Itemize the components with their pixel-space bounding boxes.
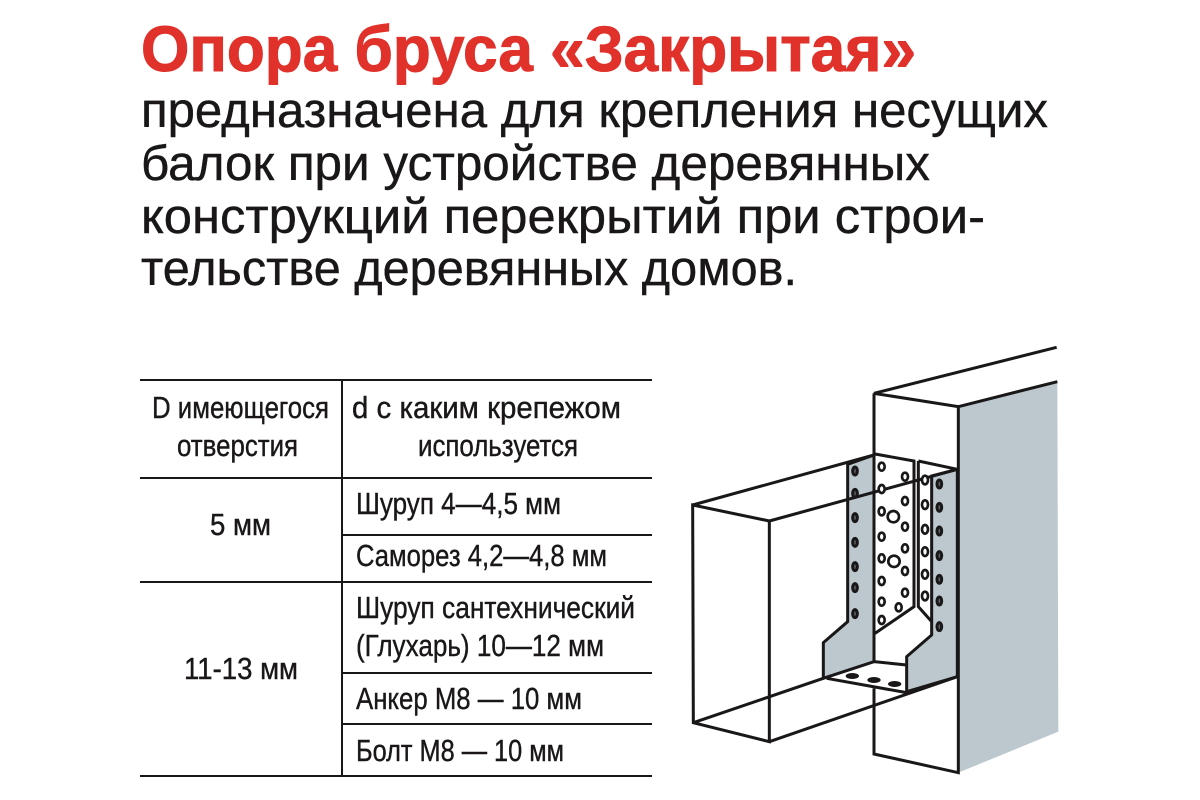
description text block [141, 84, 1048, 296]
table column: fasteners: Болт М8 — 10 мм [356, 733, 564, 768]
table column: hole diameter: 5 мм [210, 507, 271, 542]
table header: используется [418, 428, 578, 463]
back plate holes [879, 463, 928, 624]
table column: fasteners: Шуруп 4—4,5 мм [356, 486, 561, 521]
table header [152, 390, 621, 463]
table header: d с каким крепежом [352, 390, 621, 425]
description text block: балок при устройстве деревянных [141, 137, 930, 191]
beam hanger illustration [693, 347, 1058, 773]
description text block: конструкций перекрытий при строи- [141, 190, 985, 244]
table column: fasteners: (Глухарь) 10—12 мм [356, 628, 604, 663]
hanger right flange [907, 469, 957, 692]
table column: fasteners: Анкер М8 — 10 мм [356, 681, 582, 716]
description text block: предназначена для крепления несущих [141, 84, 1048, 138]
flange holes left [853, 467, 857, 618]
hanger back plate [875, 454, 914, 633]
fastener table [140, 380, 652, 776]
hanger left flange [823, 455, 874, 678]
description text block: тельстве деревянных домов. [141, 242, 797, 296]
post side face [958, 382, 1058, 773]
seat holes [846, 673, 901, 687]
table column: hole diameter: 11-13 мм [184, 651, 298, 686]
table column: fasteners: Шуруп сантехнический [356, 590, 635, 625]
table header: отверстия [177, 428, 298, 463]
post outline [874, 347, 1057, 773]
table column: hole diameter [184, 507, 298, 686]
table column: fasteners: Саморез 4,2—4,8 мм [356, 538, 607, 573]
hanger seat [827, 662, 907, 693]
table header: D имеющегося [152, 390, 329, 425]
flange holes right [937, 480, 942, 631]
title: Опора бруса «Закрытая» [141, 13, 916, 85]
table column: fasteners [356, 486, 635, 768]
beam outline [693, 455, 957, 742]
